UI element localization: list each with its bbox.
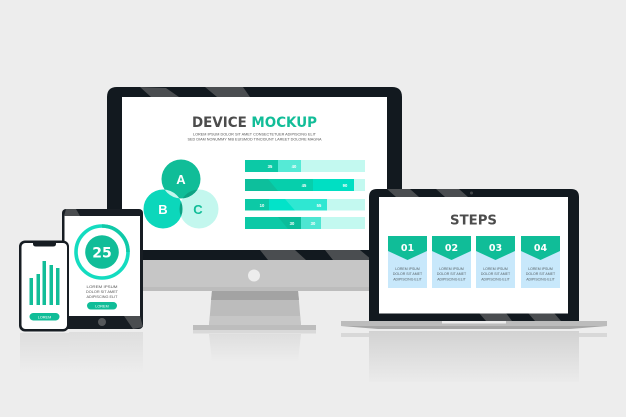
step 03: DOLOR SIT AMET — [481, 272, 511, 276]
overlap A and B — [164, 190, 180, 198]
step 02 — [432, 236, 471, 288]
phone button: LOREM — [38, 316, 51, 320]
step 01: LOREM IPSUM — [395, 267, 420, 271]
step 04: ADIPISCING ELIT — [526, 278, 556, 282]
tablet text: DOLOR SIT AMET — [86, 289, 119, 294]
phone body — [19, 240, 69, 332]
step 01 — [388, 236, 427, 288]
laptop — [341, 189, 607, 329]
bar row 3 — [245, 199, 365, 210]
tablet — [62, 209, 143, 329]
phone notch — [33, 243, 56, 246]
overlap A and C — [182, 190, 198, 198]
circle A — [162, 160, 200, 198]
subtitle — [188, 132, 322, 142]
venn diagram: B — [158, 202, 168, 217]
phone screen — [22, 243, 67, 329]
tablet home button — [98, 318, 106, 326]
bar row 4 — [245, 217, 365, 229]
step 02: ADIPISCING ELIT — [437, 278, 467, 282]
bar chart — [245, 160, 365, 229]
floor reflections — [20, 330, 607, 382]
monitor stand — [193, 290, 316, 330]
step 03: LOREM IPSUM — [483, 267, 508, 271]
overlap B and C — [180, 202, 182, 216]
step 02: DOLOR SIT AMET — [437, 272, 467, 276]
bar row 3: 10 — [260, 203, 265, 208]
subtitle: SED DIAM NONUMMY NIB EUISMOD TINCIDUNT LAREET DOLORE MAGNA — [188, 136, 322, 142]
tablet text — [86, 284, 119, 299]
step 04: LOREM IPSUM — [528, 267, 553, 271]
bar row 4: 30 — [290, 221, 295, 226]
bar row 2: 90 — [343, 183, 348, 188]
tablet text: ADIPISCING ELIT — [86, 294, 118, 299]
progress ring: 25 — [92, 246, 112, 262]
tablet text: LOREM IPSUM — [86, 284, 118, 289]
bar row 2 — [245, 179, 365, 191]
monitor bezel — [107, 87, 402, 260]
laptop bezel — [369, 189, 579, 321]
step 03: ADIPISCING ELIT — [481, 278, 511, 282]
subtitle: LOREM IPSUM DOLOR SIT AMET CONSECTETUER ADIPISCING ELIT — [193, 132, 317, 136]
step 01: DOLOR SIT AMET — [393, 272, 423, 276]
step 04: DOLOR SIT AMET — [526, 272, 556, 276]
bar row 1 — [245, 160, 365, 172]
step 01: 01 — [401, 243, 414, 254]
tablet body — [62, 209, 143, 329]
step 02: LOREM IPSUM — [439, 267, 464, 271]
laptop base — [341, 321, 607, 329]
monitor screen — [122, 97, 387, 250]
monitor chin — [107, 258, 402, 291]
venn diagram: C — [193, 202, 203, 217]
circle B — [144, 190, 182, 228]
circle C — [180, 190, 218, 228]
tablet screen — [64, 216, 140, 316]
bar row 2: 45 — [302, 183, 307, 188]
title: DEVICE MOCKUP — [192, 115, 317, 131]
bar row 1: 35 — [268, 164, 273, 169]
step 04: 04 — [534, 243, 547, 254]
bar row 4: 30 — [311, 221, 316, 226]
step 01: ADIPISCING ELIT — [393, 278, 423, 282]
steps heading: STEPS — [450, 212, 497, 228]
step 02: 02 — [445, 243, 458, 254]
step 03 — [476, 236, 515, 288]
monitor — [107, 87, 402, 330]
step 04 — [521, 236, 560, 288]
venn diagram: A — [176, 172, 186, 187]
step 03: 03 — [489, 243, 502, 254]
phone — [19, 240, 69, 332]
phone bar chart — [30, 261, 60, 305]
bar row 1: 40 — [292, 164, 297, 169]
laptop screen — [379, 197, 568, 314]
tablet button: LOREM — [95, 304, 109, 308]
venn diagram — [144, 160, 218, 228]
bar row 3: 55 — [317, 203, 322, 208]
